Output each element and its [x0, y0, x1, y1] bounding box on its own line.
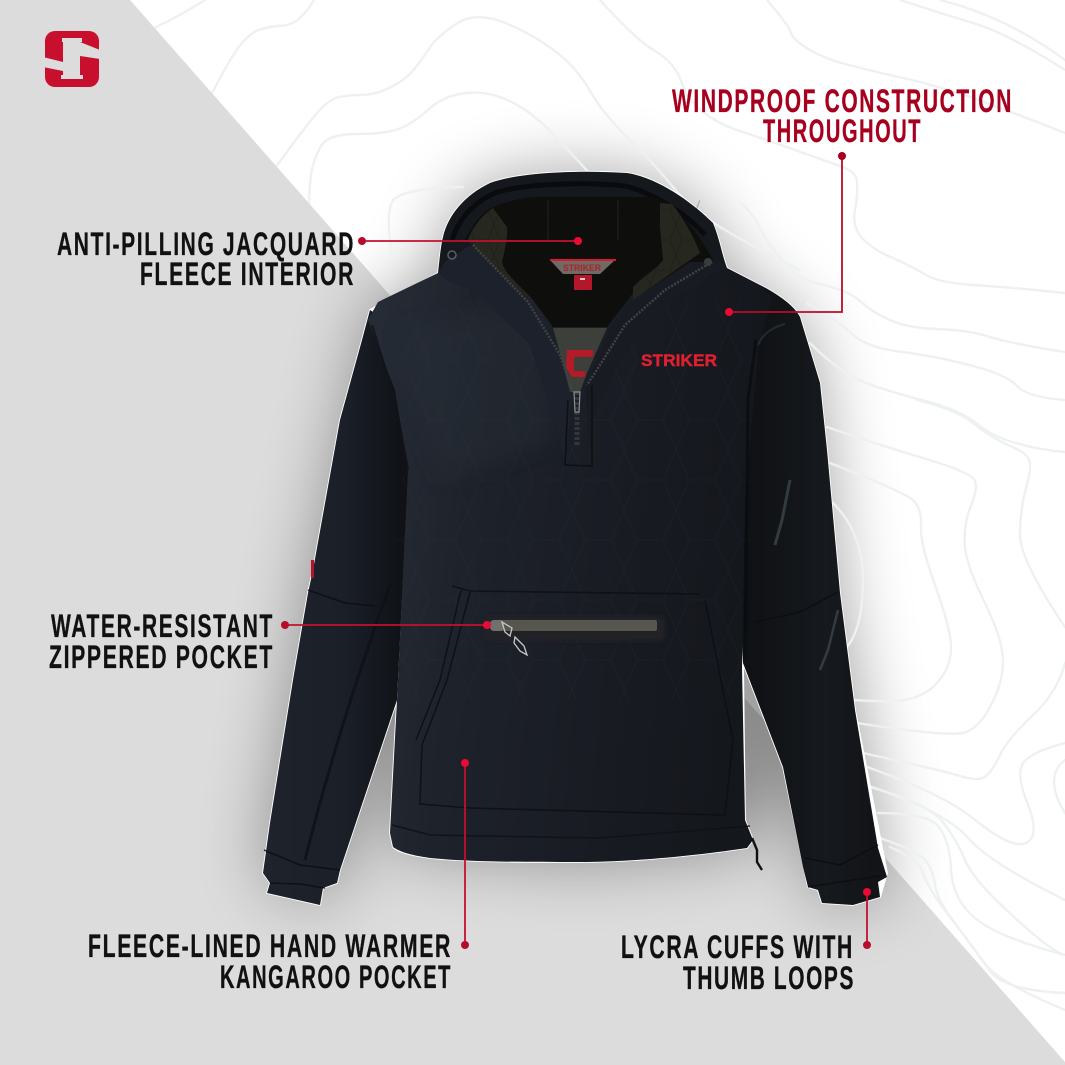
- neck label: [550, 259, 616, 290]
- right sleeve: [735, 285, 887, 905]
- callout: windproof construction throughout: [672, 83, 1013, 316]
- sleeve seams and highlights: [264, 324, 880, 888]
- hex jacquard fleece texture: [468, 200, 700, 300]
- zippered chest pocket: [485, 616, 665, 655]
- drawcord: [752, 838, 762, 870]
- callout: lycra cuffs with thumb loops: THUMB LOOPS: [683, 960, 855, 996]
- callout: windproof construction throughout: THROUGHOUT: [763, 113, 922, 149]
- callout: fleece-lined hand warmer kangaroo pocket: KANGAROO POCKET: [220, 959, 452, 995]
- hood panel seams: [548, 200, 618, 240]
- undershirt red logo: [566, 350, 593, 377]
- callout: lycra cuffs with thumb loops: LYCRA CUFFS WITH: [621, 929, 854, 965]
- undershirt: [553, 328, 607, 392]
- left sleeve: [263, 310, 410, 905]
- neck zipper teeth: [473, 245, 712, 392]
- hood exterior: [438, 172, 727, 300]
- hex jacquard patch right: [633, 203, 700, 300]
- callout: fleece-lined hand warmer kangaroo pocket: [88, 759, 469, 995]
- hex jacquard patch left: [468, 208, 533, 300]
- front zipper pull: [574, 392, 580, 445]
- jacket product illustration: [263, 172, 887, 905]
- kangaroo pocket outline: [392, 586, 750, 838]
- jacquard hex texture: [395, 300, 760, 700]
- callout: lycra cuffs with thumb loops: [621, 888, 871, 996]
- logo: Striker S emblem: [43, 31, 100, 87]
- jacket white cut-out edge: [263, 172, 887, 905]
- hood rim fold: [452, 184, 705, 240]
- light folds on chest and shoulder: [400, 300, 555, 480]
- jacket drop shadow: [263, 172, 887, 905]
- callout: anti-pilling jacquard fleece interior: ANTI-PILLING JACQUARD: [57, 226, 355, 262]
- zipper hardware at hood corners: [448, 251, 712, 266]
- zipper placket: [565, 385, 592, 466]
- callout: anti-pilling jacquard fleece interior: [57, 226, 582, 292]
- callout: water-resistant zippered pocket: WATER-RESISTANT: [51, 608, 274, 644]
- collar flaps: [438, 245, 573, 465]
- STRIKER chest logo: STRIKER: [641, 351, 717, 370]
- callout: water-resistant zippered pocket: [49, 608, 491, 675]
- hood interior lining: [465, 197, 713, 327]
- left forearm red sleeve mark: [311, 560, 314, 578]
- neck label: STRIKER: [563, 263, 601, 273]
- callout: water-resistant zippered pocket: ZIPPERED POCKET: [49, 639, 274, 675]
- jacket body: [368, 268, 772, 862]
- callout: fleece-lined hand warmer kangaroo pocket: FLEECE-LINED HAND WARMER: [88, 928, 452, 964]
- callout: anti-pilling jacquard fleece interior: FLEECE INTERIOR: [140, 256, 355, 292]
